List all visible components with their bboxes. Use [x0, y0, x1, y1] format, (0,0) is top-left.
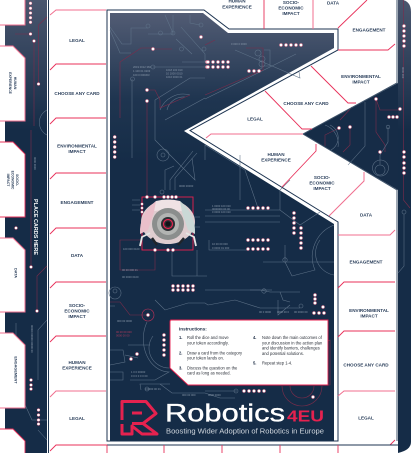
left side cards: IMPACT	[6, 174, 10, 187]
logo: R icon	[122, 402, 157, 434]
panel micro labels: 10 00 00 000	[212, 242, 228, 246]
left side cards: EXPERIENCE	[8, 72, 12, 95]
place cards here label: PLACE CARDS HERE	[32, 199, 38, 256]
panel micro labels: 0 0000 00 01	[145, 387, 161, 391]
left side cards: SOCIO-	[15, 174, 19, 186]
left side cards	[0, 0, 25, 453]
instructions box	[170, 320, 328, 385]
left column of board spaces: IMPACT	[68, 314, 86, 319]
instruction steps	[179, 335, 323, 376]
panel micro labels: 100 0 000303	[133, 73, 150, 77]
chevron cards: ENGAGEMENT	[353, 28, 386, 32]
panel micro labels: 1 100 01 0203	[133, 69, 151, 73]
panel micro labels: 0000000 00 00	[212, 207, 230, 211]
chevron cards: ECONOMIC	[309, 180, 335, 186]
chevron cards: SOCIO-	[314, 175, 331, 180]
top row cards: IMPACT	[282, 11, 300, 16]
panel micro labels: 0 0 0 0 0 0 00	[131, 374, 148, 378]
panel micro labels: 0000 00000	[179, 184, 194, 188]
instruction steps: Draw a card from the category	[187, 350, 243, 356]
panel micro labels: 1 0 0 00000	[131, 370, 146, 374]
chevron cards: ENVIRONMENTAL	[341, 74, 381, 79]
panel micro labels: 100 000 0100	[123, 247, 140, 251]
wedge background	[303, 83, 398, 190]
right column cards: ENGAGEMENT	[350, 260, 383, 264]
logo: tagline: Boosting Wider Adoption of Robotics in Europe	[166, 426, 324, 436]
panel micro labels: 0000 0000	[208, 393, 221, 397]
top row cards: SOCIO-	[283, 0, 300, 5]
left column of board spaces: SOCIO-	[69, 303, 86, 308]
left dark strip: 0000 0000	[33, 157, 37, 170]
instruction steps: card as long as needed.	[187, 370, 231, 376]
wedge circuit traces	[325, 0, 410, 273]
left column of board spaces: LEGAL	[69, 416, 85, 421]
panel micro labels: 0 000 0 0000	[231, 42, 247, 46]
top row cards: DATA	[327, 0, 340, 6]
panel micro labels: 00 00 000 01	[122, 268, 138, 272]
panel micro labels: 0 0000 01 000	[212, 246, 230, 250]
instruction steps: 2.	[179, 350, 182, 356]
instruction steps: your discussion in the action plan	[262, 340, 323, 345]
panel micro labels: 000 00 0000	[117, 319, 132, 323]
panel micro labels: 000 00 000	[182, 393, 196, 397]
right board outline	[303, 0, 397, 441]
robot with red frame	[140, 195, 196, 252]
panel circuit traces	[109, 15, 334, 406]
bottom board edge	[107, 445, 398, 453]
chevron cards: EXPERIENCE	[261, 158, 291, 162]
panel micro labels: 00 00 00 000	[116, 330, 132, 334]
logo: 4EU: 4EU	[287, 408, 324, 425]
panel micro labels	[116, 42, 308, 397]
instruction steps: 1.	[179, 335, 182, 340]
left dark strip	[5, 0, 47, 453]
chevron cards: LEGAL	[247, 116, 263, 122]
left side cards: HUMAN	[13, 77, 17, 89]
right strip background	[398, 0, 411, 453]
chevron cards: IMPACT	[313, 186, 331, 191]
left column of board spaces: CHOOSE ANY CARD	[54, 91, 100, 96]
left column of board spaces: EXPERIENCE	[62, 366, 92, 370]
top row cards: ECONOMIC	[278, 6, 304, 10]
panel micro labels: 10 1000 0010	[166, 72, 183, 76]
logo: Robotics wordmark: Robotics	[165, 399, 285, 427]
instruction steps: your token accordingly.	[187, 340, 229, 346]
panel small dots	[113, 35, 326, 399]
instruction steps: 5.	[253, 360, 256, 366]
right column cards: LEGAL	[358, 416, 374, 420]
left column of board spaces: IMPACT	[68, 149, 86, 154]
panel micro labels: 0000 00 00	[116, 334, 130, 338]
top row cards: EXPERIENCE	[222, 4, 252, 10]
panel micro labels: 00 0000 00	[294, 310, 308, 314]
left column of board spaces: DATA	[71, 253, 84, 258]
instruction steps: Repeat step 1-4.	[262, 360, 292, 366]
right column cards: ENVIRONMENTAL	[349, 308, 389, 313]
panel micro labels: 2019 0012 384	[133, 65, 151, 69]
instruction steps: your token lands on.	[187, 356, 224, 360]
wedge circuit traces: 0000 000	[401, 67, 405, 79]
instructions heading: Instructions:	[179, 326, 207, 332]
left column of board spaces: LEGAL	[69, 38, 85, 43]
chevron cards: IMPACT	[352, 80, 370, 84]
chevron cards	[206, 28, 395, 218]
left side cards: ENGAGEMENT	[14, 356, 18, 384]
chevron cards: CHOOSE ANY CARD	[283, 101, 329, 106]
instruction steps: Discuss the question on the	[187, 366, 238, 370]
panel micro labels: 0 0000 100 010	[212, 210, 231, 214]
left column of board spaces	[48, 0, 107, 453]
top row cards	[222, 0, 367, 29]
panel micro labels: 1018 100 010	[166, 68, 183, 72]
left column of board spaces: HUMAN	[68, 360, 86, 365]
instruction steps: 4.	[253, 335, 256, 340]
right column cards	[338, 230, 395, 445]
panel outline	[107, 10, 338, 441]
left dark strip: 00000 00000 00000 00	[30, 325, 34, 353]
left side cards: ECONOMIC	[10, 171, 14, 190]
chevron cards: HUMAN	[267, 152, 285, 157]
instruction steps: 3.	[179, 366, 182, 370]
panel micro labels: 1016 0000 01	[166, 75, 183, 79]
left column of board spaces: ENVIRONMENTAL	[57, 144, 97, 148]
panel micro labels: 00 0 0000	[259, 310, 271, 314]
panel micro labels: 00 0000 0100	[122, 275, 139, 279]
right column cards: IMPACT	[360, 314, 378, 318]
chevron cards: DATA	[360, 212, 373, 218]
panel micro labels: 0000 00 0	[277, 310, 289, 314]
panel micro labels: 1 0000 100 010	[212, 204, 231, 208]
right column cards: CHOOSE ANY CARD	[343, 362, 389, 368]
instruction steps: Note down the main outcomes of	[262, 335, 323, 340]
left column of board spaces: ENGAGEMENT	[61, 200, 94, 205]
central panel background	[110, 13, 334, 441]
instruction steps: and potential solutions.	[262, 351, 304, 356]
instruction steps: Roll the dice and move	[187, 335, 229, 340]
left side cards: DATA	[14, 268, 18, 278]
left column of board spaces: ECONOMIC	[64, 308, 90, 314]
instruction steps: and identify barriers, challenges	[262, 346, 320, 350]
